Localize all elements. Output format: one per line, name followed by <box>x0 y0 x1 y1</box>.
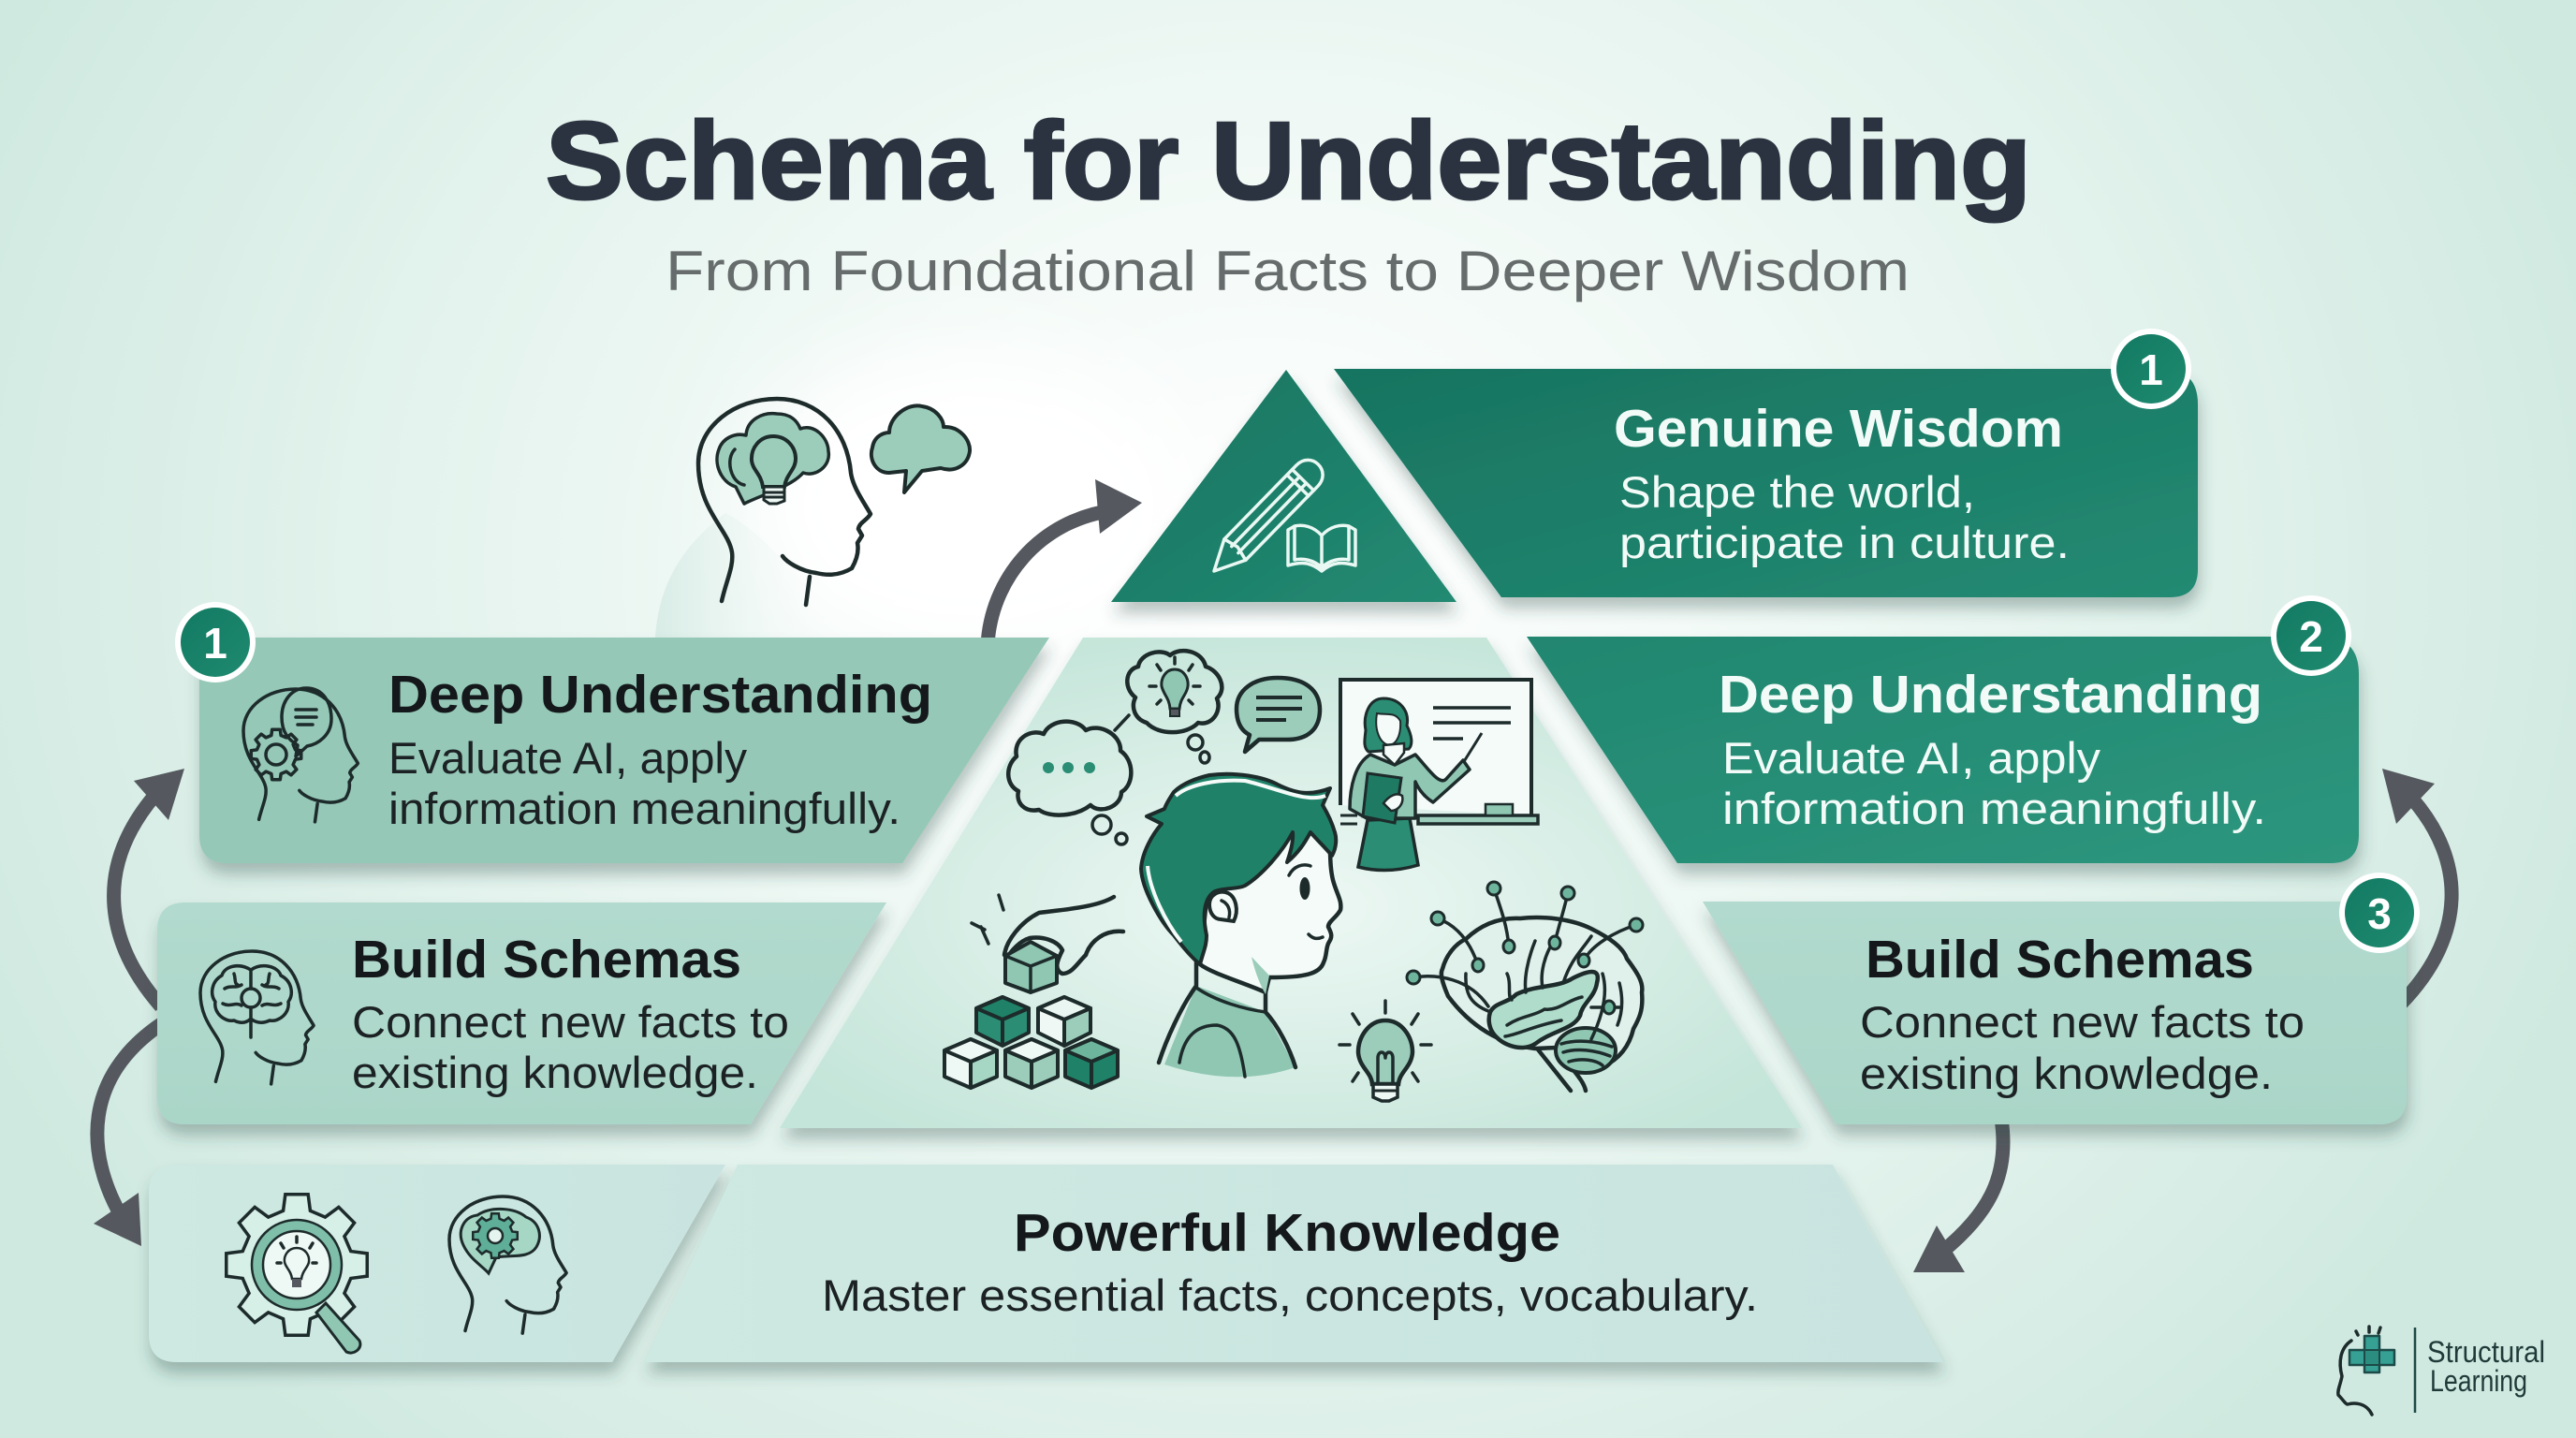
heading: Deep Understanding <box>388 665 932 725</box>
body text <box>1722 733 2266 833</box>
body text: existing knowledge. <box>1860 1049 2273 1098</box>
divider <box>2414 1328 2416 1413</box>
body text: Evaluate AI, apply <box>388 733 747 783</box>
heading: Build Schemas <box>1866 930 2254 990</box>
icon: boy in profile <box>1141 774 1340 1077</box>
icon: thought cloud with dots <box>1008 722 1131 844</box>
body text: information meaningfully. <box>388 784 900 833</box>
badge: Genuine Wisdom 1 <box>2111 329 2191 409</box>
icon: speech bubble <box>1237 678 1320 752</box>
body text: Shape the world, <box>1619 467 1975 517</box>
heading: Genuine Wisdom <box>1614 399 2063 459</box>
badge: Genuine Wisdom 1: 1 <box>2139 345 2163 394</box>
icon: teacher at whiteboard <box>1340 680 1538 871</box>
panel: Powerful Knowledge <box>645 1165 1943 1362</box>
heading: Build Schemas <box>352 930 741 990</box>
icon: head with brain and gear <box>449 1196 566 1333</box>
body text <box>352 997 789 1097</box>
panel: Deep Understanding (left) <box>199 638 1049 863</box>
body text: existing knowledge. <box>352 1048 758 1097</box>
glow behind the top of the pyramid <box>739 346 1189 665</box>
heading: Deep Understanding <box>1719 665 2262 725</box>
panel: Deep Understanding (right) <box>1527 637 2359 863</box>
body text: Connect new facts to <box>352 997 789 1047</box>
heading: Powerful Knowledge <box>1014 1203 1560 1263</box>
head backdrop arc <box>655 513 847 638</box>
logo: Structural Learning <box>2338 1327 2545 1415</box>
body text: Evaluate AI, apply <box>1722 733 2101 783</box>
icon: head with gear and speech bubble <box>243 688 358 822</box>
icon: hand placing block <box>972 895 1123 992</box>
body text <box>1619 467 2070 567</box>
badge: Deep Understanding 1 <box>175 602 256 682</box>
icon: open book <box>1288 525 1355 571</box>
icon: lightbulb <box>1339 1001 1431 1101</box>
icon: pencil <box>1204 454 1329 581</box>
icon: thought cloud with lightbulb <box>1115 651 1222 763</box>
logo text: Learning <box>2430 1364 2527 1398</box>
arrow: left side downward <box>94 1024 161 1246</box>
arrow: right side downward <box>1913 1119 2003 1272</box>
logo icon <box>2338 1327 2394 1415</box>
body text: information meaningfully. <box>1722 784 2266 833</box>
icon: head with brain <box>200 951 314 1084</box>
badge: Deep Understanding 2 <box>2271 595 2351 676</box>
title: Schema for Understanding <box>546 99 2031 222</box>
subtitle: From Foundational Facts to Deeper Wisdom <box>666 240 1910 302</box>
icon: stack of blocks <box>944 997 1118 1088</box>
panel: apex triangle <box>1111 370 1456 602</box>
body text: Master essential facts, concepts, vocabulary. <box>822 1270 1758 1320</box>
badge: Deep Understanding 2: 2 <box>2299 612 2323 661</box>
logo text: Structural <box>2427 1335 2545 1369</box>
body text: participate in culture. <box>1619 518 2070 567</box>
icon: head with brain and lightbulb <box>698 399 871 605</box>
panel: Build Schemas (left) <box>157 902 886 1124</box>
icon: gear with magnifying glass <box>227 1195 367 1353</box>
panel: Build Schemas (right) <box>1703 902 2407 1124</box>
panel: Genuine Wisdom <box>1334 369 2198 597</box>
badge: Build Schemas 3 <box>2339 873 2420 953</box>
arrow: up to the apex <box>988 479 1142 646</box>
panel: central pyramid illustration <box>780 638 1802 1128</box>
icon: brain with neural connections <box>1407 882 1643 1091</box>
arrow: right side upward <box>2382 769 2452 1004</box>
body text <box>388 733 900 833</box>
arrow: left side upward <box>114 769 184 1006</box>
panel: icons foundation <box>149 1165 725 1362</box>
badge: Build Schemas 3: 3 <box>2367 889 2392 938</box>
icon: speech cloud <box>871 405 970 492</box>
body text <box>1860 997 2305 1098</box>
body text: Connect new facts to <box>1860 997 2305 1047</box>
logo text <box>2427 1335 2545 1398</box>
badge: Deep Understanding 1: 1 <box>203 619 227 668</box>
